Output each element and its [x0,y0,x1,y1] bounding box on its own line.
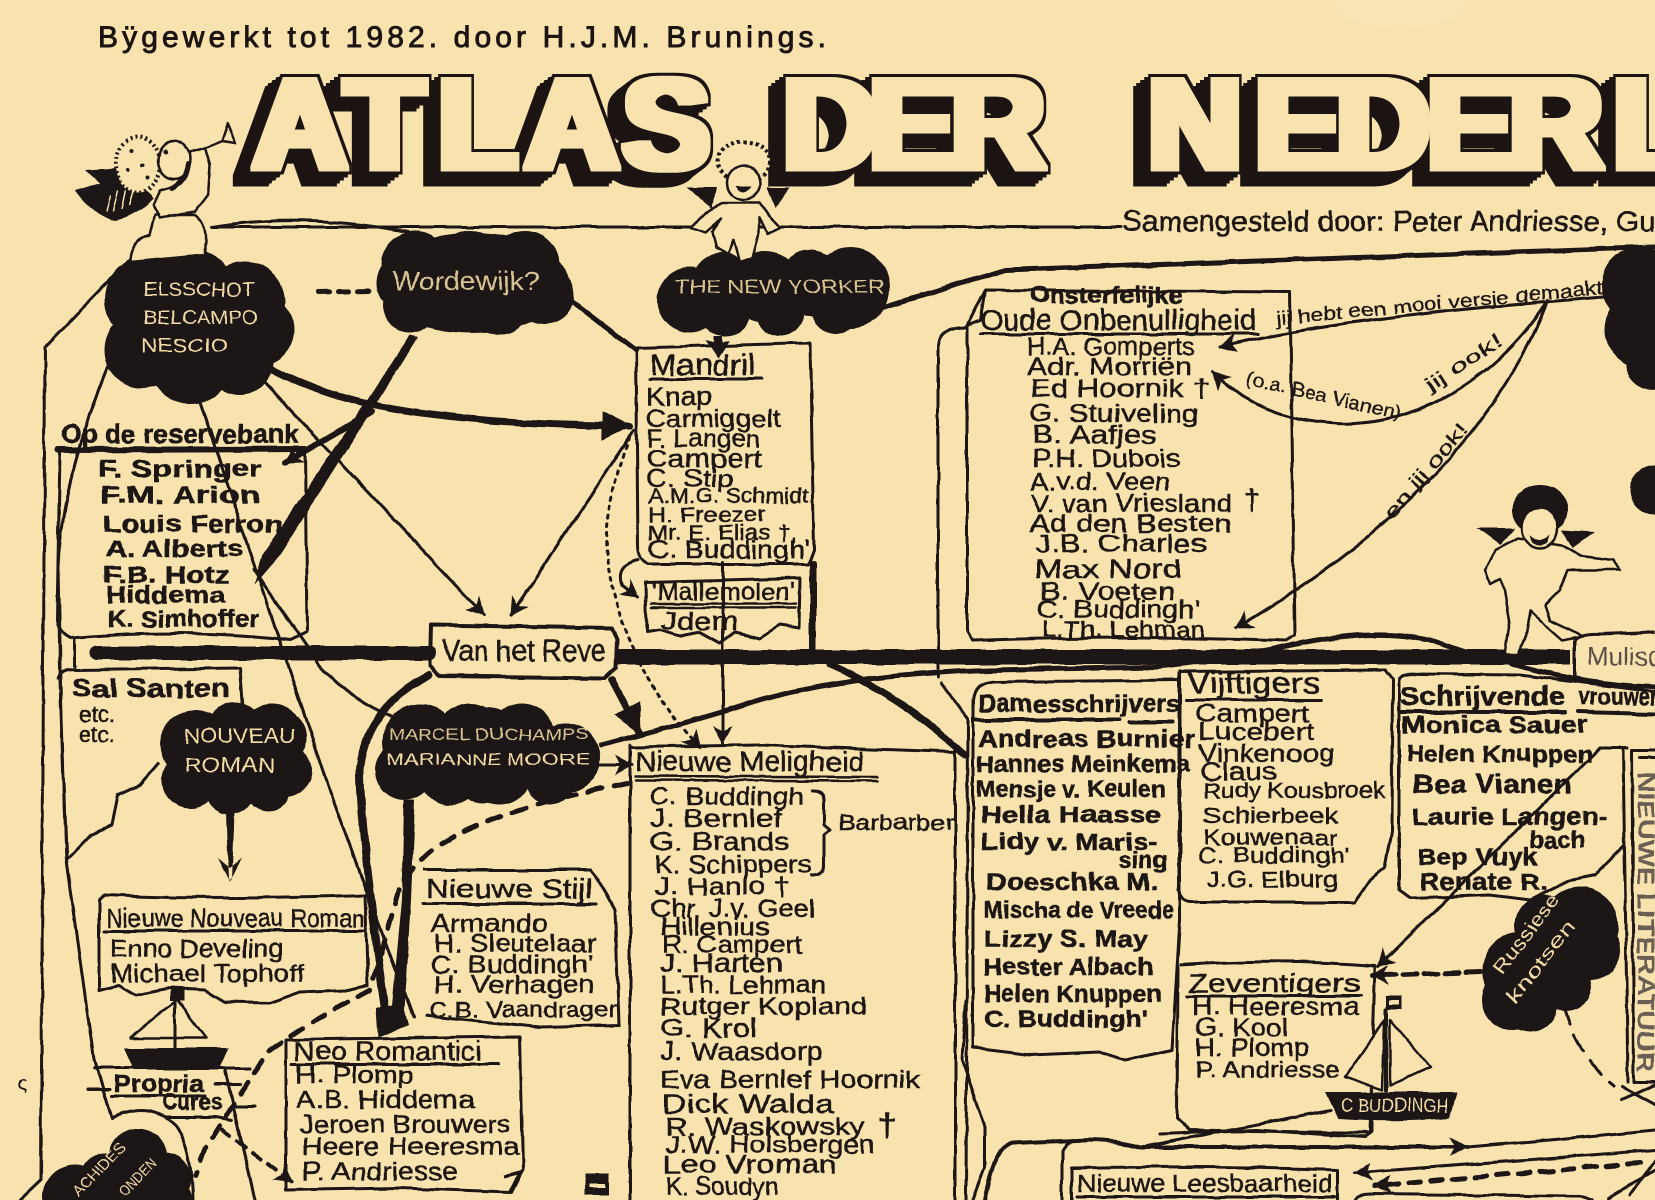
panel: Mandril: Knap [646,383,712,411]
arrow: Elsschot to Van het Reve [255,372,484,615]
panel: Mandril: Campert [646,445,762,473]
panel: Nieuwe Stijl [423,870,619,1027]
panel: Neo Romantici: P. Andriesse [302,1158,458,1186]
title: ATLAS DER NEDERL [253,51,1655,197]
panel: Vijftigers: C. Buddingh' [1198,843,1350,868]
panel: Damesschrijvers: Hella Haasse [981,802,1161,829]
title: ATLAS DER NEDERL: DER [783,51,1045,197]
panel: Nieuwe Nouveau Roman: Nieuwe Nouveau Roman [106,903,365,933]
cloud: Marcel Duchamps Marianne Moore [375,703,600,805]
panel: Oude Onbenulligheid: Onsterfelijke [1030,282,1183,308]
panel: Damesschrijvers: Mensje v. Keulen [976,776,1166,803]
panel: Nieuwe Meligheid [630,745,955,1200]
panel: Vijftigers: Claus [1200,758,1277,786]
arrow: you wrote a nice verse [1220,278,1610,347]
panel: Mandril: Mandril [650,349,755,382]
cloud: Russische knotsen: Russiese [1489,890,1564,978]
panel: Propria Cures [88,1068,255,1120]
panel: Nieuwe Stijl: Nieuwe Stijl [426,874,593,904]
panel: Vijftigers: Schierbeek [1203,803,1339,828]
top rule with compiler line: Samengesteld door: Peter Andriesse, Gu [1122,206,1655,238]
panel: Schrijvende vrouwen: Schrijvende [1400,681,1565,711]
panel: Damesschrijvers: Helen Knuppen [984,981,1161,1008]
panel: Oude Onbenulligheid: G. Stuiveling [1029,400,1199,428]
panel: Op de reservebank: F.M. Arion [100,482,260,509]
bracket: Barbarber: Barbarber [838,810,954,835]
cloud: Marcel Duchamps Marianne Moore: MARIANNE MOORE [386,750,590,769]
cloud: Marcel Duchamps Marianne Moore: MARCEL DUCHAMPS [388,725,588,744]
panel: Op de reservebank: K. Simhoffer [108,606,259,633]
panel: Vijftigers: Vinkenoog [1198,740,1335,768]
panel: Nieuwe Meligheid: J. Waasdorp [660,1038,823,1066]
panel: Sal Santen: Sal Santen [71,673,230,703]
panel: Zeventigers: P. Andriesse [1195,1057,1340,1082]
line: Wordewijk to Mandril [564,295,636,350]
panel: Oude Onbenulligheid: Ad den Besten [1030,510,1232,538]
panel: Mandril: F. Langen [646,425,760,453]
cloud: Wordewijk: Wordewijk? [392,266,540,296]
main thick timeline [97,653,1570,657]
line: Elsschot to Neo Romantici [196,390,413,1017]
panel: Vijftigers: Rudy Kousbroek [1203,778,1386,803]
panel: Oude Onbenulligheid: P.H. Dubois [1032,445,1180,473]
panel: Sal Santen [58,668,243,860]
panel: Damesschrijvers: C. Buddingh' [984,1006,1148,1033]
panel: Oude Onbenulligheid: V. van Vriesland [1030,490,1232,518]
panel: Nieuwe Stijl: C.B. Vaandrager [429,997,617,1022]
arrow: Mandril to Van het Reve [511,430,634,615]
panel: Nieuwe Meligheid: Eva Bernlef Hoornik [660,1066,921,1094]
icon: cherub with trumpet [75,123,236,262]
panel: Schrijvende vrouwen: Laurie Langen- [1412,804,1607,831]
panel: Nieuwe Meligheid: Chr. J.v. Geel [651,895,815,923]
dotted curve: Mandril to Nieuwe Meligheid [606,437,700,748]
panel: Nieuwe Stijl: H. Sleutelaar [434,930,596,958]
panel: Mandril: Mr. E. Elias †, [648,522,797,545]
panel: Neo Romantici [286,1036,523,1192]
arrow: you too [1212,300,1548,424]
panel: Damesschrijvers [973,670,1195,1060]
arrow: Duchamp to Nieuwe Meligheid [598,764,632,766]
panel: Nieuwe Meligheid: J. Bernlef [650,805,782,833]
panel: Neo Romantici: H. Plomp [296,1061,413,1089]
panel: Nieuwe Stijl: C. Buddingh' [431,951,593,979]
panel: Nieuwe Meligheid: K. Schippers [654,851,812,879]
panel: Nieuwe Meligheid: R. Campert [662,931,802,959]
dashes: Elsschot to Wordewijk [318,291,372,292]
cloud: The New Yorker [657,248,890,336]
panel: Schrijvende vrouwen: bach [1530,827,1585,854]
panel: Nieuwe Meligheid: C. Buddingh [649,783,804,811]
paper stain [1335,0,1465,26]
thick line: Duchamp to Neo Romantici [376,800,415,1038]
panel: Damesschrijvers: sing [1118,847,1168,874]
panel: Damesschrijvers: Lidy v. Maris- [981,829,1158,856]
panel: Nieuwe Meligheid: Rutger Kopland [660,993,867,1021]
panel: Oude Onbenulligheid: Oude Onbenulligheid [980,304,1256,337]
panel: Vijftigers: Lucebert [1198,718,1314,746]
panel: Schrijvende vrouwen: Bep Vuyk [1417,844,1539,871]
panel: Op de reservebank: Op de reservebank [61,419,300,449]
panel: Nieuwe Meligheid: Nieuwe Meligheid [635,746,864,777]
arrow: Wordewijk to reservebank [254,335,418,585]
panel: Nieuwe Leesbaarheid: Nieuwe Leesbaarheid [1077,1170,1332,1198]
panel: Nieuwe Stijl: H. Verhagen [434,971,594,999]
panel: Nieuwe Stijl: Armando [431,910,548,938]
cloud: Russische knotsen: knotsen [1502,916,1581,1008]
panel: Schrijvende vrouwen: Bea Vianen [1412,769,1572,799]
panel: Neo Romantici: A.B. Hiddema [296,1086,474,1114]
panel: Mandril: Carmiggelt [646,405,781,433]
cloud: Wordewijk [376,230,574,335]
cloud: Elsschot Belcampo Nescio: BELCAMPO [143,308,258,329]
panel: Zeventigers: G. Kool [1195,1014,1288,1042]
cloud: Russische knotsen [1482,887,1620,1032]
panel: Op de reservebank: F. Springer [98,456,262,483]
arrow: you wrote a nice verse: jij hebt een mooi versje gemaakt [1274,278,1605,330]
arrow: you too: (o.a. Bea Vianen) [1244,368,1403,424]
cloud: Elsschot Belcampo Nescio: ELSSCHOT [143,280,255,301]
panel: Vijftigers [1179,667,1393,902]
panel: Schrijvende vrouwen [1399,674,1655,900]
cloud: Nouveau Roman [160,702,312,815]
icon: boat left [124,987,228,1070]
arrow: branch to F. Springer [285,412,372,463]
panel: Mallemolen: 'Mallemolen' [652,578,795,606]
bracket: Barbarber [812,790,954,875]
panel: Nieuwe Meligheid: J. Hanlo † [655,873,790,901]
panel: Nieuwe Meligheid: Hillenius [660,913,770,941]
cloud: The New Yorker: THE NEW YORKER [675,277,885,297]
icon: small flag [585,1173,609,1195]
panel: Vijftigers: Kouwenaar [1203,825,1338,850]
arrow: New Yorker to the right [883,247,1655,307]
panel: Nieuwe Nouveau Roman: Enno Develing [110,935,283,963]
panel: Nieuwe Meligheid: G. Krol [660,1015,757,1043]
panel: Nieuwe Meligheid: † [878,1107,896,1143]
panel: Mandril: C. Buddingh' [648,536,810,564]
panel: Sal Santen: etc. [79,722,114,747]
panel: Nieuwe Nouveau Roman: Michael Tophoff [110,960,304,988]
arrow: and you too: en jij ook! [1381,419,1473,523]
panel: Damesschrijvers: Lizzy S. May [984,926,1149,953]
top rule with compiler line [212,206,1655,238]
dashed path: Duchamp towards Propria Cures [196,783,627,1175]
cloud: Nouveau Roman: ROMAN [184,754,275,777]
panel: Schrijvende vrouwen: Helen Knuppen [1406,741,1593,768]
panel: Zeventigers [1177,962,1375,1133]
panel: Zeventigers: Zeventigers [1188,968,1360,998]
arrow: Elsschot to Mandril [258,362,630,426]
icon: boat Buddingh: C BUDDINGH [1341,1096,1449,1117]
cloud: top right [1602,247,1655,515]
panel: Oude Onbenulligheid: A.v.d. Veen [1030,468,1170,496]
panel: Oude Onbenulligheid: Adr. Morriën [1027,353,1192,381]
panel: Damesschrijvers: Mischa de Vreede [984,897,1174,924]
icon: boat Buddingh [1325,995,1457,1121]
arrow: Van het Reve to Nieuwe Meligheid [612,680,640,733]
panel: Oude Onbenulligheid: B. Voeten [1040,578,1175,606]
icon: sitting cherub [686,142,790,262]
panel: Schrijvende vrouwen: Monica Sauer [1401,712,1588,739]
panel: Nieuwe Meligheid: Dick Walda [662,1089,835,1119]
panel: Op de reservebank [57,419,307,640]
panel: Zeventigers: H. Plomp [1195,1034,1309,1062]
dashed arrow: Russische knotsen to Zeventigers [1372,972,1480,976]
panel: Zeventigers: H. Heeresma [1192,993,1359,1021]
panel: Damesschrijvers: Hester Albach [984,954,1153,981]
panel: vertical strip right [1623,748,1655,1082]
panel: Op de reservebank: A. Alberts [106,536,243,563]
panel: Nieuwe Nouveau Roman [99,895,368,1003]
panel: Neo Romantici: Heere Heeresma [302,1133,519,1161]
panel: Op de reservebank: Louis Ferron [103,511,283,538]
panel: Oude Onbenulligheid: J.B. Charles [1035,530,1207,558]
arrow: you too: jij ook! [1420,331,1507,397]
panel: Vijftigers: Vijftigers [1187,667,1320,700]
panel: Op de reservebank: F.B. Hotz [103,562,230,589]
dashed line: Russische knotsen downward [1564,1007,1614,1087]
arrow: and you too [1236,300,1548,628]
thick line: Mandril to Damesschrijvers [813,563,965,755]
panel: Nieuwe Meligheid: J.W. Holsbergen [666,1131,875,1159]
panel: Van het Reve: Van het Reve [442,633,606,668]
panel: Nieuwe Meligheid: J. Harten [660,950,783,978]
panel: Mallemolen: Jdem [661,608,738,636]
panel: Nieuwe Meligheid: R. Waskowsky [665,1113,866,1141]
panel: Mallemolen [646,578,800,643]
line: reservebank to Duchamp [254,570,396,718]
curved arrow: Mandril to Mallemolen [620,560,638,597]
panel: Propria Cures: Propria [114,1071,205,1098]
panel: Oude Onbenulligheid: L.Th. Lehman [1042,617,1205,642]
panel: Propria Cures: Cures [163,1089,222,1116]
arrow: Schrijvende vrouwen to Zeventigers [1378,748,1627,967]
panel: Oude Onbenulligheid: Max Nord [1034,554,1182,584]
panel: Van het Reve [430,625,617,678]
connector: reservebank to Sal Santen [72,640,76,667]
arrow: nouveau roman cloud down [218,800,242,882]
cloud: bottom left: ACHIDES [69,1140,129,1200]
panel: Damesschrijvers: Andreas Burnier [978,726,1195,753]
panel: Schrijvende vrouwen: Renate R. [1419,869,1548,896]
panel: Mandril [636,343,814,564]
panel: Oude Onbenulligheid: † [1243,484,1260,517]
panel: Oude Onbenulligheid [967,282,1295,642]
icon: standing grinning cherub [1477,485,1620,655]
panel: Mandril: A.M.G. Schmidt [648,485,809,508]
dashed arrow: Propria Cures to P. Andriesse [222,1130,292,1182]
panel: Damesschrijvers: Hannes Meinkema [976,751,1191,778]
panel: Nieuwe Meligheid: Leo Vroman [663,1151,837,1179]
outer frame lines [20,257,985,1200]
panel: Damesschrijvers: Damesschrijvers [978,690,1180,718]
cloud: Nouveau Roman: NOUVEAU [184,725,295,748]
panel: Neo Romantici: Neo Romantici [294,1036,482,1066]
panel: Op de reservebank: Hiddema [106,582,226,609]
panel: Sal Santen: etc. [79,702,114,727]
arrow: Mandril to Nieuwe Meligheid [722,562,724,743]
panel: Neo Romantici: Jeroen Brouwers [299,1111,511,1139]
mark: margin glyph: ς [18,1073,28,1095]
bottom routing lines [985,1085,1655,1200]
cloud: Elsschot Belcampo Nescio [104,249,294,404]
panel: Oude Onbenulligheid: Ed Hoornik † [1030,375,1210,403]
cloud: bottom left [43,1128,192,1200]
panel: Vijftigers: Campert [1195,700,1309,728]
panel: Mandril: C. Stip [646,465,733,493]
thick arc: Van het Reve to Neo Romantici [360,675,429,1013]
panel: Nieuwe Meligheid: L.Th. Lehman [660,971,826,999]
panel: Oude Onbenulligheid: H.A. Gomperts [1027,333,1195,361]
panel: Vijftigers: J.G. Elburg [1206,867,1338,892]
title: ATLAS DER NEDERL: ATLAS [253,51,710,197]
caption: updated by: Bÿgewerkt tot 1982. door H.J.M. Brunings. [98,21,826,54]
cloud: Elsschot Belcampo Nescio: NESCIO [141,336,228,357]
panel: Mandril: H. Freezer [648,504,766,527]
panel: Damesschrijvers: Doeschka M. [986,869,1158,896]
cloud: bottom left: ONDEN [116,1155,160,1200]
hump line from Duchamp cloud to Mulisch [601,634,1655,745]
panel: Mulisch [1574,632,1655,688]
panel: Nieuwe Meligheid: G. Brands [650,828,790,856]
panel: Oude Onbenulligheid: B. Aafjes [1032,421,1157,449]
panel: Oude Onbenulligheid: C. Buddingh' [1037,596,1200,624]
arrow: New Yorker to Mandril [706,336,730,358]
